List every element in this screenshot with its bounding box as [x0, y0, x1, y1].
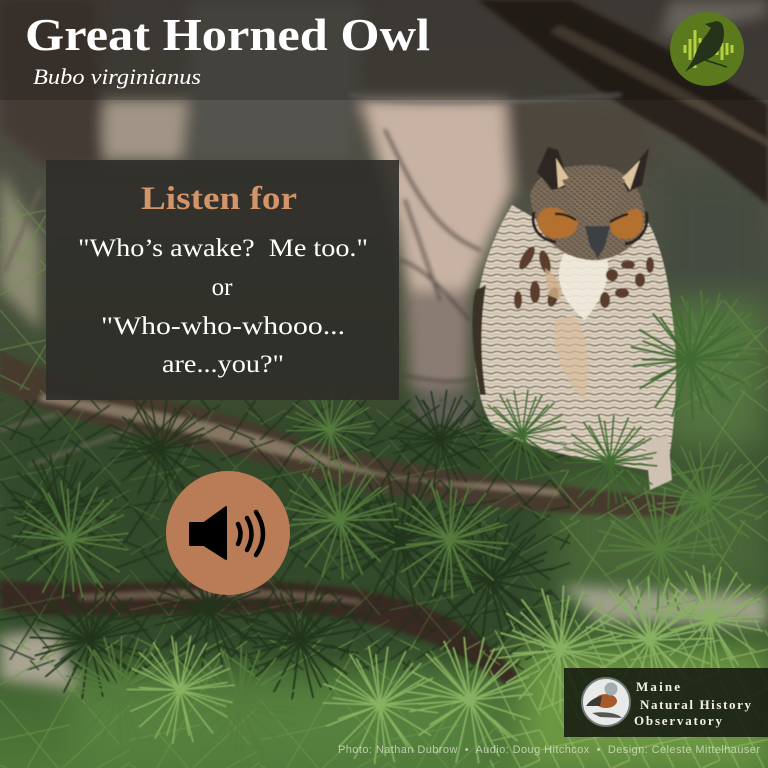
owl [473, 147, 676, 490]
organisation name: Maine [636, 679, 680, 694]
call text: "Who-who-whooo... [101, 313, 345, 340]
icon: crow with sound bars [670, 12, 744, 86]
scientific name: Bubo virginianus [33, 64, 201, 89]
call text: "Who’s awake? Me too." [78, 235, 368, 262]
owl head [530, 147, 649, 260]
organisation name: Natural History [640, 697, 752, 712]
organisation name [634, 679, 752, 728]
call text: are...you?" [162, 351, 284, 378]
owl body [475, 205, 676, 470]
pine needle texture [0, 200, 768, 768]
title: Great Horned Owl [25, 9, 430, 60]
needles in front of owl [476, 292, 756, 520]
panel: listen for [46, 160, 399, 400]
logo: Maine Natural History Observatory [564, 668, 768, 737]
tree limb top right [478, 0, 768, 205]
icon: duck badge [582, 678, 630, 726]
chest blotches [514, 244, 654, 309]
icon: audio speaker button [166, 471, 290, 595]
organisation name: Observatory [634, 713, 722, 728]
call text [78, 235, 368, 378]
call text: or [212, 274, 233, 301]
top dark band [0, 0, 768, 100]
photo credits: Photo: Nathan Dubrow • Audio: Doug Hitchcox • Design: Celeste Mittelhauser [338, 744, 760, 756]
heading: listen for: Listen for [141, 181, 297, 217]
